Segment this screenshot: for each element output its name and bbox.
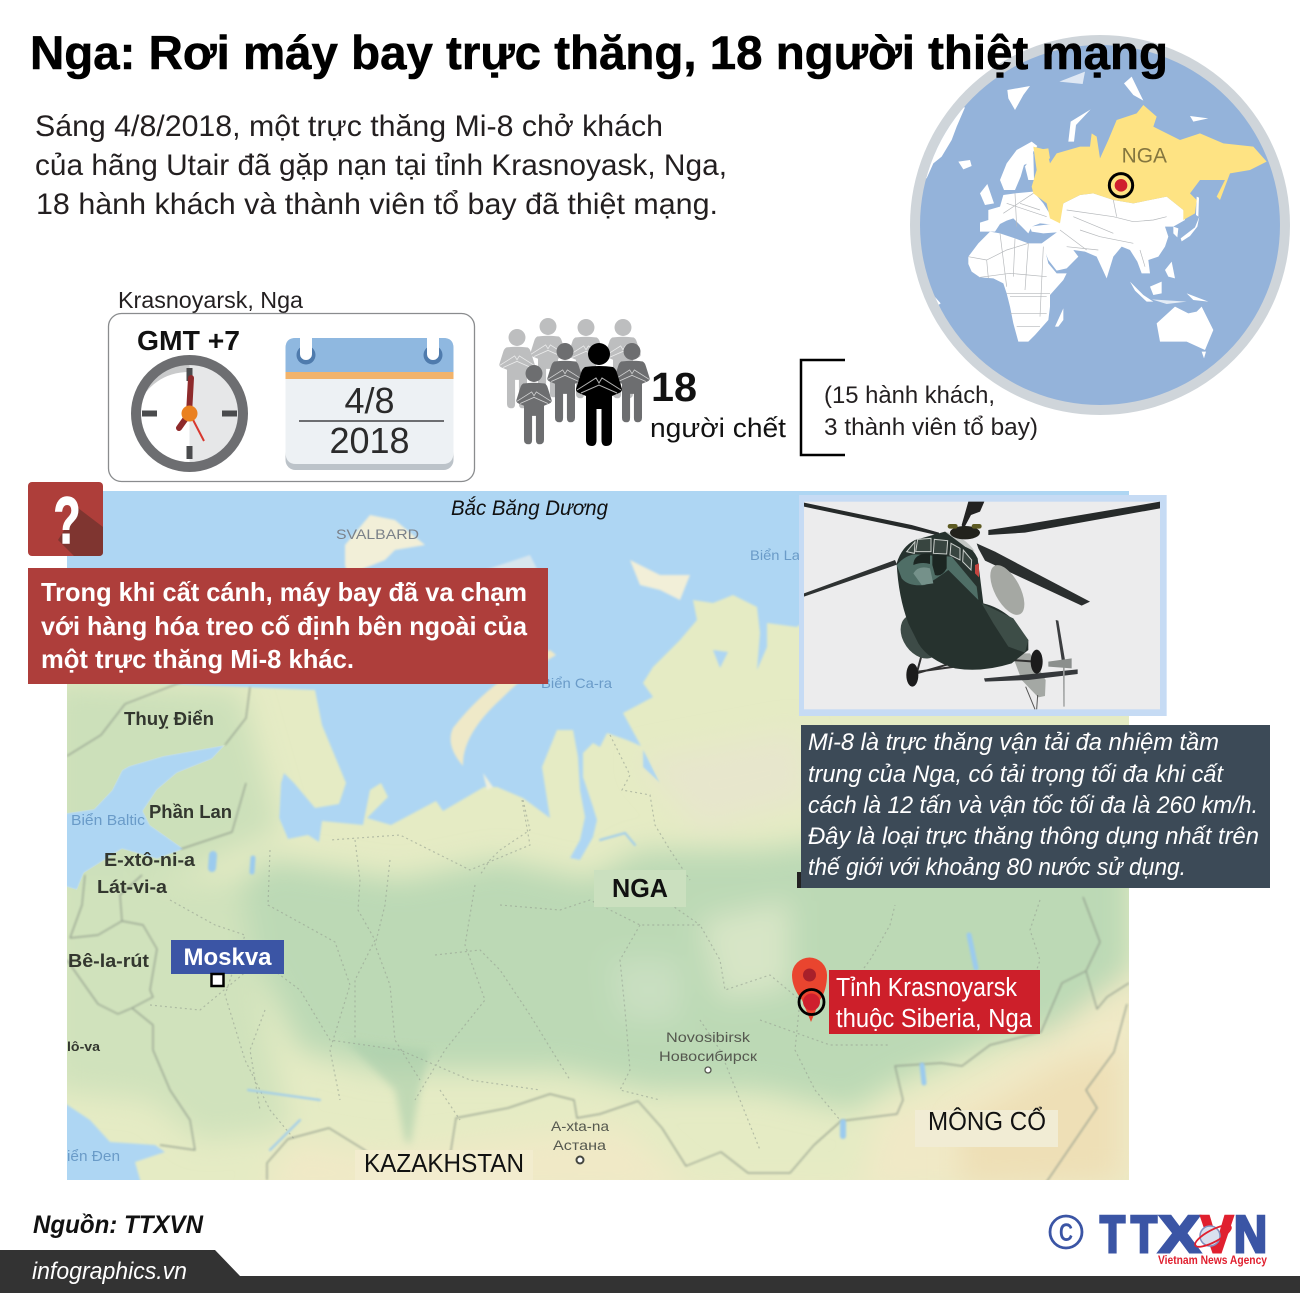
map labels: neighbouring countries: Lát-vi-a xyxy=(97,877,168,897)
source: Nguồn: TTXVN xyxy=(33,1211,204,1239)
photo: Mi-8 helicopter xyxy=(799,495,1167,716)
map label: Astana xyxy=(551,1118,609,1164)
death count xyxy=(650,364,787,443)
map labels: seas west: iển Đen xyxy=(67,1149,120,1165)
copyright symbol: C xyxy=(1059,1219,1073,1247)
intro text xyxy=(35,110,727,221)
death breakdown: (15 hành khách, xyxy=(824,382,995,409)
icon: group of people xyxy=(499,318,650,446)
map labels: neighbouring countries: Bê-la-rút xyxy=(68,951,149,971)
Moskva marker: Moskva xyxy=(183,944,272,971)
logo: TTXVN: X xyxy=(1159,1206,1200,1264)
intro text: Sáng 4/8/2018, một trực thăng Mi-8 chở khách xyxy=(35,110,663,143)
callout: Mi-8 description: trung của Nga, có tải trọng tối đa khi cất xyxy=(808,761,1224,788)
callout: Mi-8 description: cách là 12 tấn và vận tốc tối đa là 260 km/h. xyxy=(808,792,1258,819)
icon: calendar with date: 4/8 xyxy=(344,380,395,421)
icon: question mark xyxy=(28,482,103,557)
logo: TTXVN: V xyxy=(1201,1206,1233,1264)
Moskva marker xyxy=(171,940,284,986)
map label: Svalbard: SVALBARD xyxy=(336,527,419,542)
intro text: của hãng Utair đã gặp nạn tại tỉnh Krasnoyask, Nga, xyxy=(35,149,727,182)
intro text: 18 hành khách và thành viên tổ bay đã thiệt mạng. xyxy=(36,188,718,221)
callout: cause xyxy=(28,568,548,684)
callout: Mi-8 description: Mi-8 là trực thăng vận tải đa nhiệm tầm xyxy=(808,729,1219,756)
Krasnoyarsk label: Tỉnh Krasnoyarsk xyxy=(836,974,1017,1002)
map label: Astana: Астана xyxy=(553,1137,606,1153)
location label: Krasnoyarsk, Nga xyxy=(118,287,303,313)
map labels: neighbouring countries: Phần Lan xyxy=(149,802,232,822)
Krasnoyarsk pin xyxy=(792,958,827,1022)
callout: cause: Trong khi cất cánh, máy bay đã va chạm xyxy=(41,577,527,607)
map labels: seas west xyxy=(67,813,145,1165)
icon: question mark: ? xyxy=(54,483,80,557)
map labels: neighbouring countries xyxy=(67,709,232,1054)
location marker on globe xyxy=(1109,174,1133,197)
callout: cause: một trực thăng Mi-8 khác. xyxy=(41,644,354,674)
logo: TTXVN xyxy=(1100,1206,1268,1267)
map label: Mongolia xyxy=(915,1106,1058,1147)
locator globe xyxy=(910,35,1290,415)
map labels: neighbouring countries: Thuỵ Điển xyxy=(124,709,214,729)
callout: cause: với hàng hóa treo cố định bên ngoài của xyxy=(41,611,528,641)
callout: Mi-8 description: thế giới với khoảng 80 nước sử dụng. xyxy=(808,854,1186,881)
logo: TTXVN: N xyxy=(1234,1206,1267,1264)
icon: clock xyxy=(136,360,243,467)
map labels: neighbouring countries: lô-va xyxy=(67,1039,101,1054)
map label: Astana: A-xta-na xyxy=(551,1118,609,1134)
map labels: seas west: Biển Baltic xyxy=(71,813,145,829)
map label: Arctic Ocean: Bắc Băng Dương xyxy=(451,495,608,520)
Krasnoyarsk label xyxy=(829,970,1040,1034)
map label: NGA: NGA xyxy=(612,873,668,903)
label: NGA on globe: NGA xyxy=(1122,144,1167,167)
bracket xyxy=(801,360,845,455)
logo: TTXVN: T xyxy=(1100,1206,1125,1264)
icon: calendar with date: 2018 xyxy=(329,420,410,461)
map label: Kara Sea: Biển Ca-ra xyxy=(541,675,612,691)
death count: người chết xyxy=(650,413,787,443)
map label: Mongolia: MÔNG CỔ xyxy=(928,1106,1046,1136)
map label: Novosibirsk: Novosibirsk xyxy=(666,1029,751,1045)
callout: Mi-8 description: Đây là loại trực thăng thông dụng nhất trên xyxy=(808,823,1259,850)
map label: NGA xyxy=(594,870,686,907)
title: Nga: Rơi máy bay trực thăng, 18 người thiệt mạng xyxy=(30,26,1168,79)
death breakdown: 3 thành viên tổ bay) xyxy=(824,414,1038,441)
map label: Novosibirsk xyxy=(659,1029,758,1073)
map labels: neighbouring countries: E-xtô-ni-a xyxy=(104,850,196,870)
death breakdown xyxy=(824,382,1038,441)
copyright symbol xyxy=(1050,1216,1082,1248)
callout: Mi-8 description xyxy=(801,725,1270,888)
Krasnoyarsk label: thuộc Siberia, Nga xyxy=(836,1005,1033,1033)
icon: calendar with date xyxy=(286,337,454,470)
GMT label: GMT +7 xyxy=(137,325,240,356)
map label: Novosibirsk: Новосибирск xyxy=(659,1048,758,1064)
website: infographics.vn xyxy=(32,1258,187,1285)
logo: TTXVN: Vietnam News Agency xyxy=(1158,1255,1268,1267)
map label: Kazakhstan: KAZAKHSTAN xyxy=(364,1148,524,1178)
death count: 18 xyxy=(651,364,697,410)
logo: TTXVN: T xyxy=(1131,1206,1157,1264)
footer bar xyxy=(0,1250,1300,1293)
panel: time and date xyxy=(108,314,474,482)
map label: Laptev Sea: Biển La xyxy=(750,547,800,563)
panel: map of Russia xyxy=(50,491,1140,1200)
